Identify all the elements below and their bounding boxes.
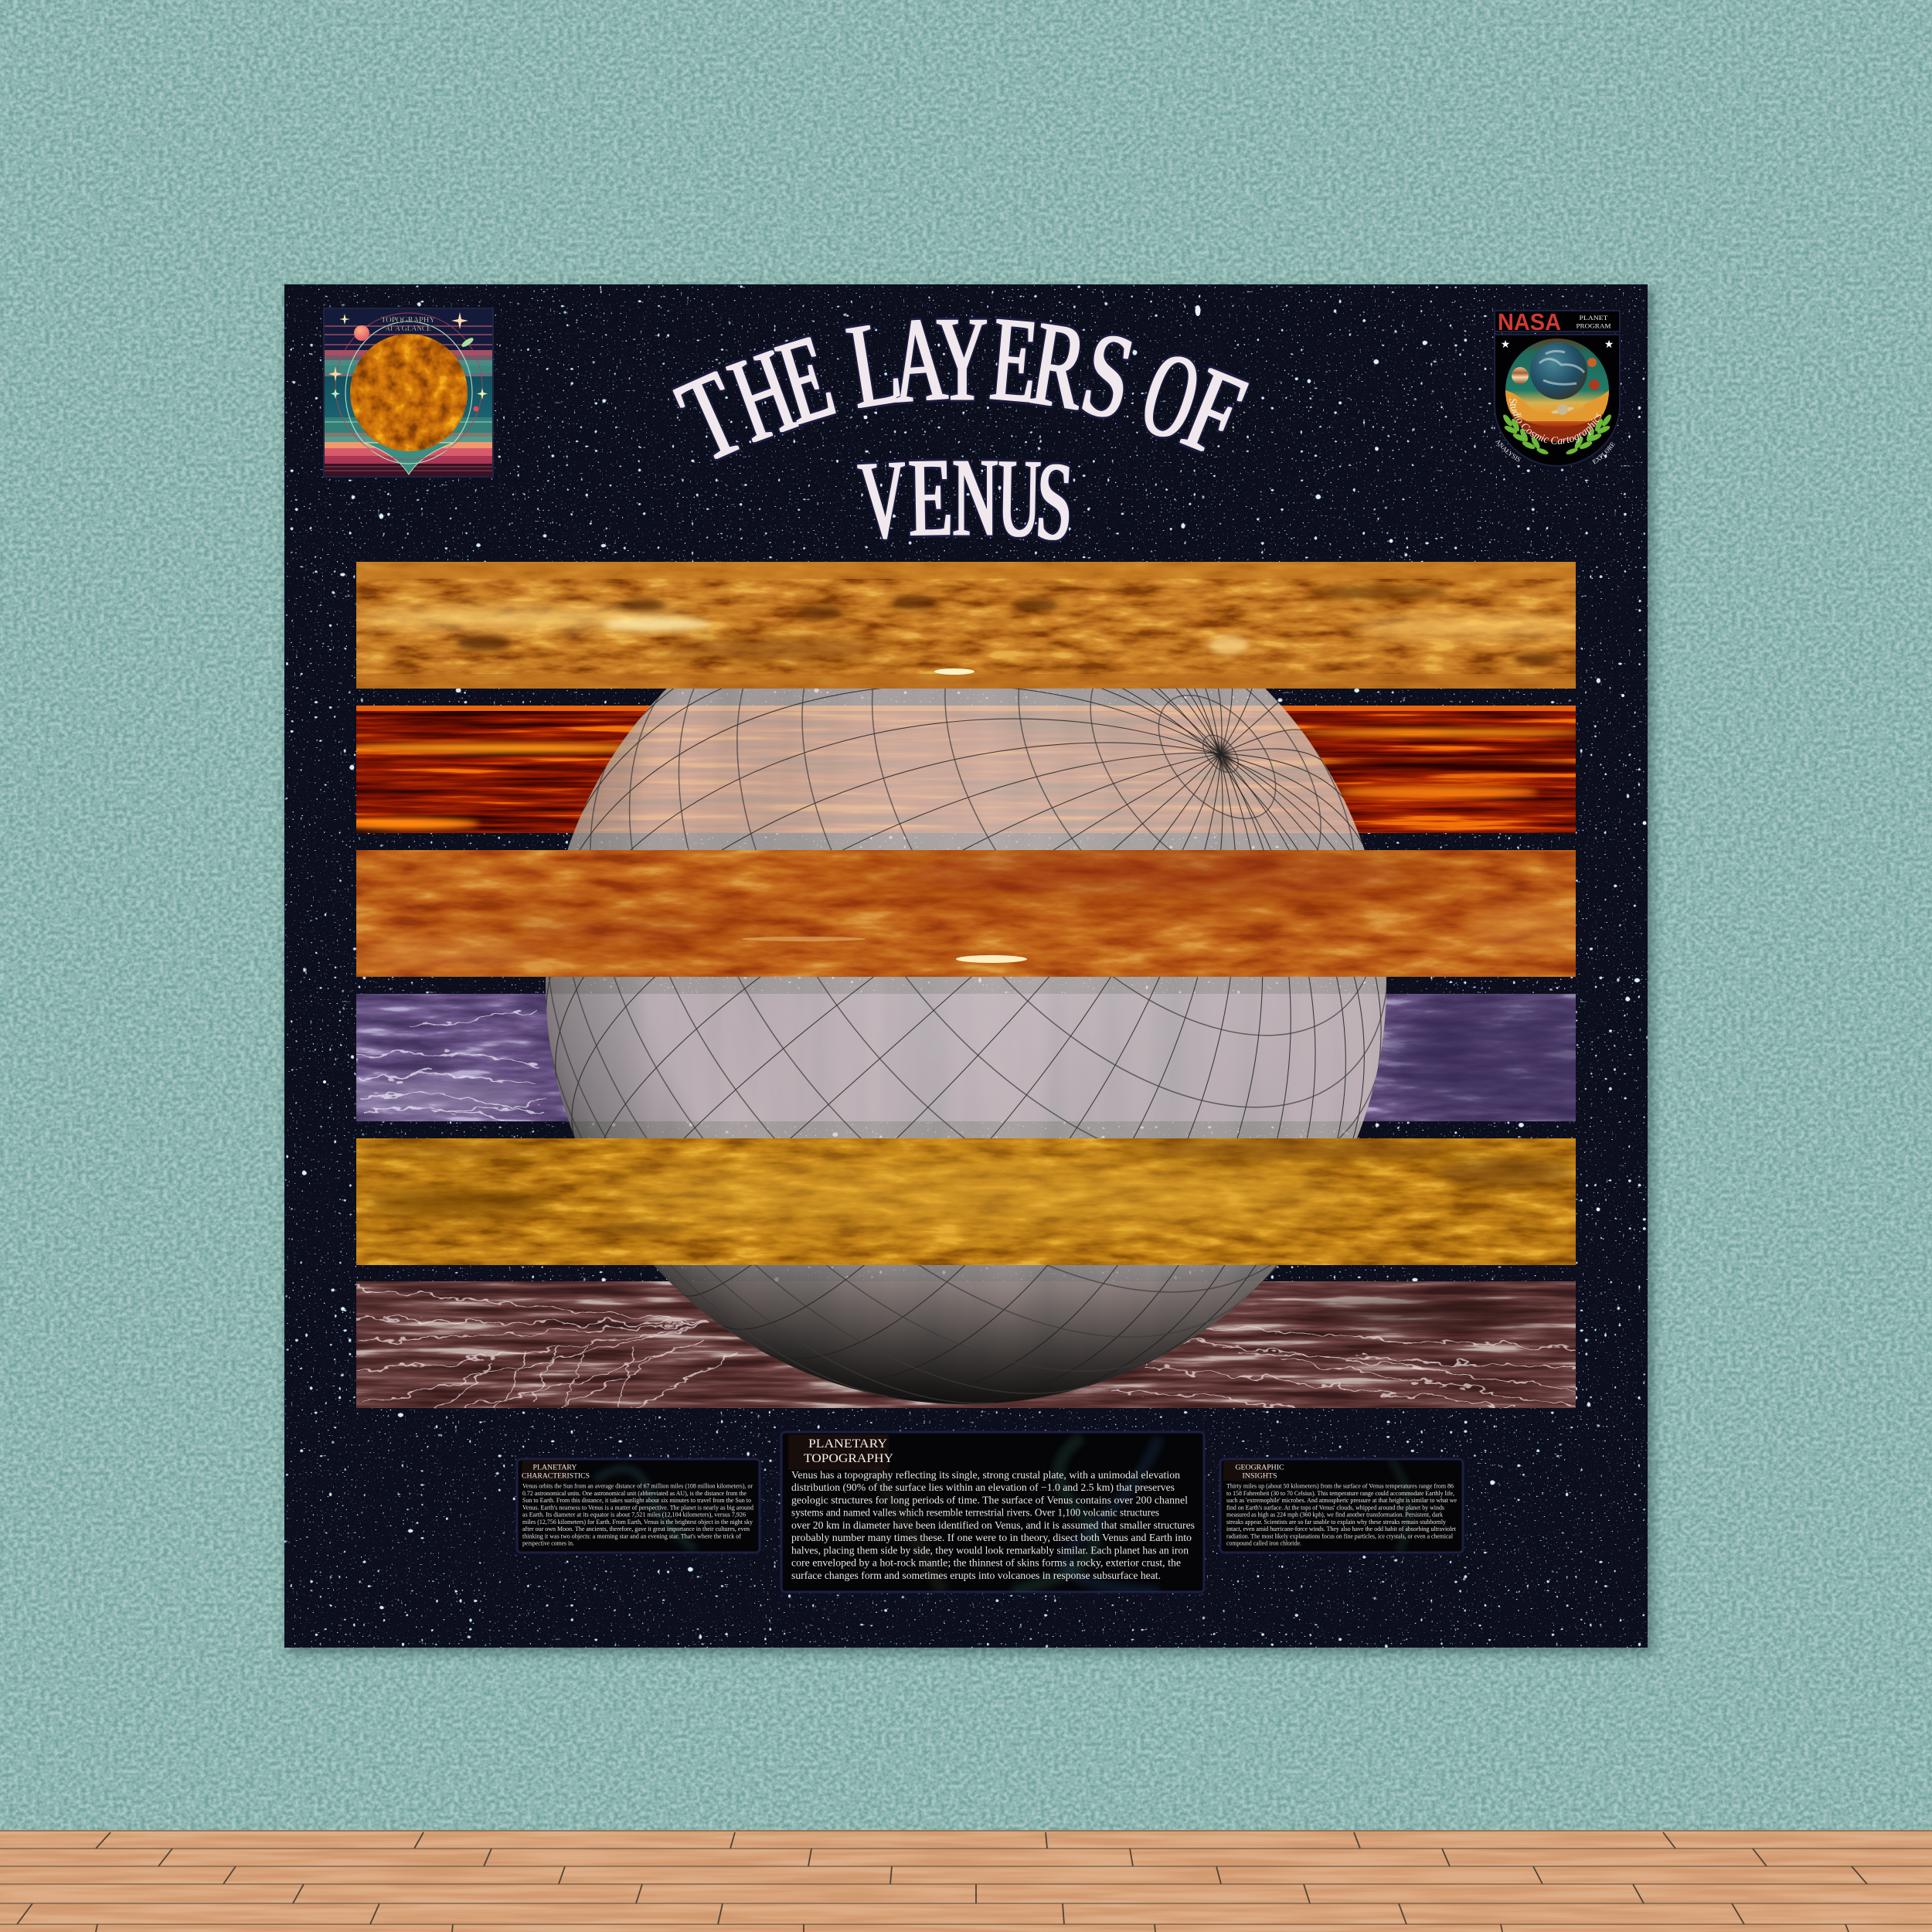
- logo stars: [1501, 339, 1614, 351]
- panel body text: [791, 1469, 1195, 1581]
- panel body text: Venus orbits the Sun from an average distance of 67 million miles (108 million kilometers), or: [522, 1482, 753, 1490]
- icon heading text: AT A GLANCE: [385, 325, 431, 333]
- panel body text: [522, 1482, 753, 1547]
- title: THE LAYERS OF VENUS: [661, 292, 1261, 564]
- panel body text: streaks appear. Scientists are so far unable to explain why these streaks remain stubbornly: [1226, 1519, 1447, 1526]
- title: THE LAYERS OF VENUS: R: [1023, 296, 1094, 437]
- panel body text: after our own Moon. The ancients, therefore, gave it great importance in their cultures, even: [522, 1526, 750, 1532]
- panel body text: such as 'extremophile' microbes. And atmospheric pressure at that height is similar to what we: [1226, 1497, 1457, 1504]
- panel body text: 0.72 astronomical units. One astronomical unit (abbreviated as AU), is the distance from the: [522, 1490, 747, 1497]
- panel body text: perspective comes in.: [522, 1540, 574, 1547]
- panel body text: compound called iron chloride.: [1226, 1540, 1301, 1547]
- panel body text: Venus. Earth's nearness to Venus is a matter of perspective. The planet is nearly as big around: [522, 1504, 753, 1511]
- panel body text: probably number many times these. If one were to in theory, disect both Venus and Earth into: [791, 1532, 1192, 1543]
- panel body text: distribution (90% of the surface lies within an elevation of −1.0 and 2.5 km) that preserves: [791, 1481, 1175, 1493]
- panel body text: systems and named valles which resemble terrestrial rivers. Over 1,100 volcanic structures: [791, 1507, 1159, 1519]
- title: THE LAYERS OF VENUS: V: [856, 436, 910, 563]
- panel body text: to 158 Fahrenheit (30 to 70 Celsius). This temperature range could accommodate Earthly life,: [1226, 1490, 1454, 1497]
- panel: planetary topography: [781, 1432, 1204, 1592]
- logo lower arc labels: [1494, 437, 1617, 466]
- panel heading: TOPOGRAPHY: [804, 1452, 893, 1465]
- icon heading text: [381, 316, 435, 333]
- poster starfield background: [284, 284, 1648, 1648]
- icon: small planets and sparkles: [328, 312, 488, 411]
- title: THE LAYERS OF VENUS: S: [1033, 437, 1076, 564]
- icon heading text: TOPOGRAPHY: [381, 316, 435, 325]
- logo stars: ★: [1604, 339, 1614, 351]
- title: THE LAYERS OF VENUS: E: [765, 309, 847, 451]
- logo lower arc labels: EXPLORE: [1592, 442, 1615, 464]
- panel body text: geologic structures for long periods of time. The surface of Venus contains over 200 channel: [791, 1495, 1188, 1505]
- panel: planetary characteristics: [517, 1459, 760, 1553]
- panel body text: core enveloped by a hot-rock mantle; the thinnest of skins forms a rocky, exterior crust, the: [791, 1557, 1181, 1569]
- panel body text: thinking it was two objects: a morning star and an evening star. That's where the trick of: [522, 1532, 741, 1539]
- sphere: grey Venus globe with graticule: [546, 689, 1386, 1404]
- logo lower arc labels: ANALYSIS: [1495, 440, 1521, 462]
- icon: ornamental shield under planet: [365, 443, 453, 474]
- title: THE LAYERS OF VENUS: L: [840, 293, 910, 434]
- panel body text: intact, even amid hurricane-force winds. They also have the odd habit of absorbing ultraviolet: [1226, 1526, 1457, 1532]
- logo header plate: PLANET: [1580, 314, 1608, 321]
- panel body text: surface changes form and sometimes erupts into volcanoes in response subsurface heat.: [791, 1570, 1161, 1581]
- panel heading: [1235, 1464, 1284, 1481]
- title: THE LAYERS OF VENUS: U: [997, 435, 1041, 560]
- title: THE LAYERS OF VENUS: E: [907, 436, 954, 560]
- panel body text: radiation. The most likely explanations focus on fine particles, ice crystals, or even a chemical: [1226, 1532, 1454, 1539]
- title: THE LAYERS OF VENUS: N: [953, 436, 998, 560]
- logo header plate: PROGRAM: [1577, 321, 1611, 329]
- band 6: maroon radar layer with bright fractures: [356, 1281, 1576, 1408]
- band 3: rust surface strip: [355, 850, 1577, 977]
- panel body text: over 20 km in diameter have been identified on Venus, and it is assumed that smaller structures: [791, 1519, 1195, 1531]
- logo: NASA Planet Program mission patch: [1494, 308, 1621, 467]
- wooden plank floor: [0, 1830, 1932, 1932]
- title: THE LAYERS OF VENUS: F: [1168, 342, 1261, 484]
- icon: venus planet disc: [350, 334, 468, 451]
- panel heading: GEOGRAPHIC: [1235, 1464, 1284, 1471]
- band 5: golden surface strip: [356, 1138, 1577, 1265]
- panel body text: Sun to Earth. From this distance, it takes sunlight about six minutes to travel from the Sun to: [522, 1497, 751, 1504]
- panel heading: CHARACTERISTICS: [522, 1473, 590, 1481]
- band 1: global Venus map strip: [355, 562, 1584, 689]
- band 4: purple radar layer: [356, 994, 1576, 1121]
- panel heading: PLANETARY: [808, 1437, 887, 1451]
- logo motto: Studio Cosmic Cartographics: [1509, 399, 1601, 444]
- panel body text: [1226, 1482, 1457, 1547]
- panel body text: Venus has a topography reflecting its single, strong crustal plate, with a unimodal elevation: [791, 1469, 1180, 1481]
- logo header plate: [1495, 308, 1620, 335]
- band 2: molten red layer: [340, 706, 1592, 833]
- title: THE LAYERS OF VENUS: T: [661, 345, 760, 488]
- sphere graticule: meridians: [546, 689, 1382, 1403]
- panel body text: Thirty miles up (about 50 kilometers) from the surface of Venus temperatures range from 86: [1226, 1482, 1454, 1490]
- title: THE LAYERS OF VENUS: E: [986, 292, 1043, 430]
- title: THE LAYERS OF VENUS: O: [1128, 325, 1214, 468]
- panel body text: halves, placing them side by side, they would look remarkably similar. Each planet has an iron: [791, 1544, 1189, 1556]
- panel body text: measured as high as 224 mph (360 kph), we find another transformation. Persistent, dark: [1226, 1512, 1444, 1519]
- logo header plate: NASA: [1498, 308, 1561, 335]
- icon: Topography at a glance badge: [323, 308, 494, 478]
- title: THE LAYERS OF VENUS: S: [1071, 304, 1145, 446]
- poster drop shadow: [287, 289, 1654, 1654]
- panel body text: as Earth. Its diameter at its equator is about 7,521 miles (12,104 kilometers), versus 7,926: [522, 1512, 746, 1519]
- logo shield: [1495, 335, 1620, 466]
- panel: geographic insights: [1220, 1459, 1463, 1553]
- panel body text: find on Earth's surface. At the tops of Venus' clouds, whipped around the planet by winds: [1226, 1504, 1444, 1511]
- panel body text: miles (12,756 kilometers) for Earth. From Earth, Venus is the brightest object in the night sky: [522, 1519, 753, 1526]
- sphere pole shadow: [1211, 740, 1234, 771]
- panel heading: [522, 1464, 590, 1481]
- logo illustrated circle: [1505, 338, 1609, 442]
- panel heading: PLANETARY: [533, 1464, 577, 1471]
- logo stars: ★: [1501, 339, 1510, 351]
- panel heading: [804, 1437, 893, 1465]
- title: THE LAYERS OF VENUS: H: [716, 324, 811, 468]
- logo laurel leaves: [1502, 413, 1613, 456]
- sphere graticule: parallels: [451, 513, 1444, 1500]
- panel heading: INSIGHTS: [1243, 1473, 1277, 1481]
- title: THE LAYERS OF VENUS: Y: [937, 292, 988, 426]
- title: THE LAYERS OF VENUS: A: [888, 292, 950, 429]
